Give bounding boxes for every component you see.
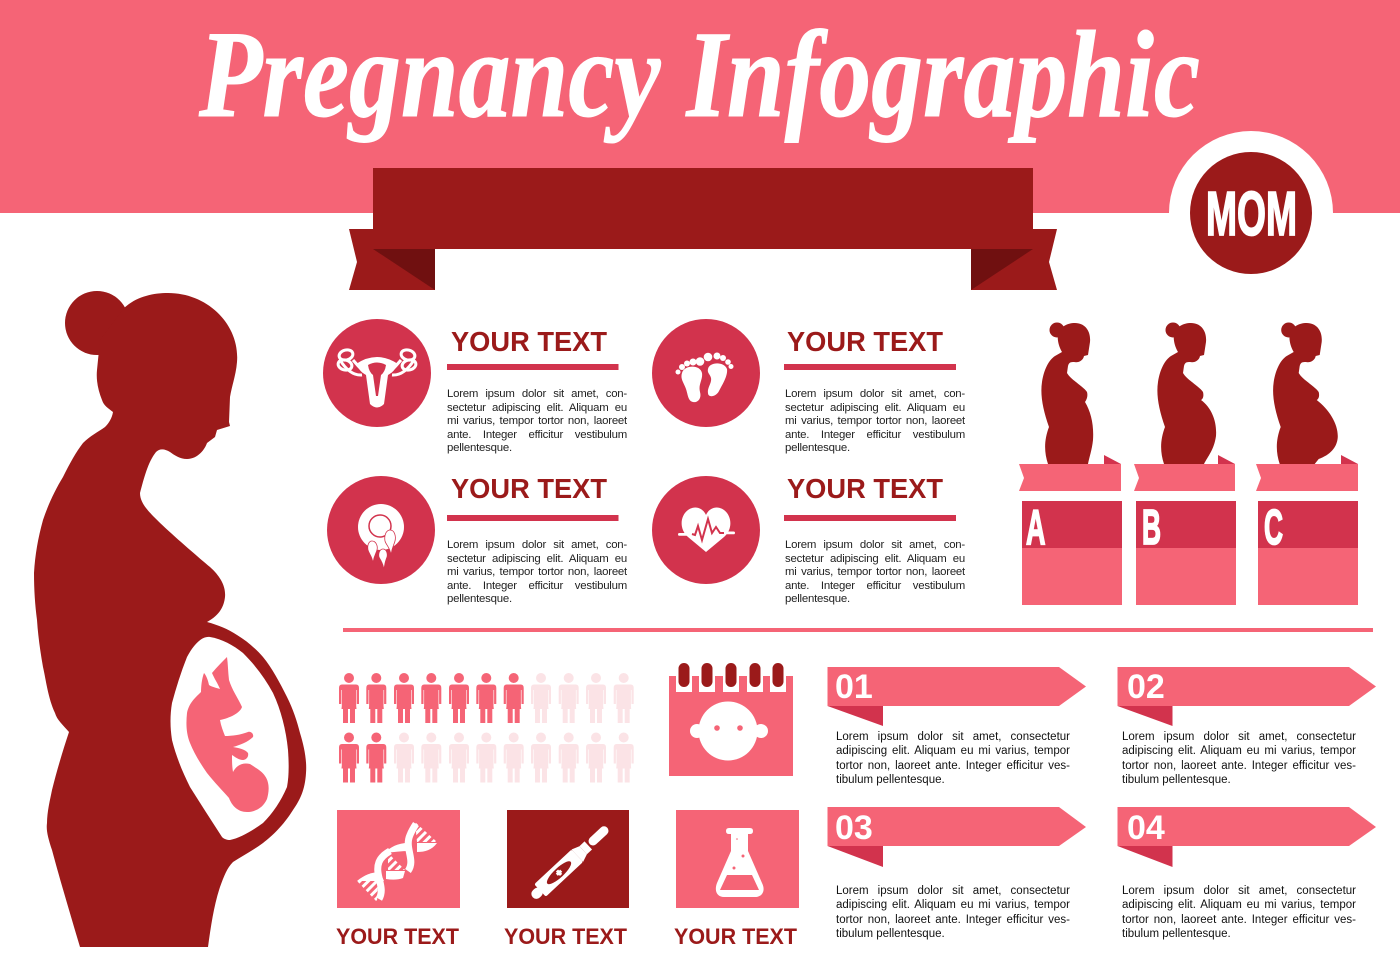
body text: sectetur adipiscing elit. Aliquam eu [447, 553, 627, 565]
body text: sectetur adipiscing elit. Aliquam eu [447, 402, 627, 414]
body text: pellentesque. [447, 442, 512, 454]
body text [447, 539, 627, 609]
body text: ante. Integer efficitur vestibulum [447, 429, 627, 441]
icon: uterus [323, 319, 431, 427]
feature: fertilisation [327, 473, 627, 609]
step 01: Lorem ipsum dolor sit amet, consectetur [836, 731, 1070, 743]
caption: DNA: YOUR TEXT [336, 924, 459, 949]
silhouette A [1041, 322, 1093, 464]
icon: DNA helix [357, 822, 437, 902]
pictogram row 2: 2 of 11 [339, 732, 634, 782]
caption: flask: YOUR TEXT [674, 924, 797, 949]
body text: pellentesque. [785, 593, 850, 605]
box B [1136, 501, 1236, 605]
step 01: adipiscing elit. Aliquam eu mi varius, tempor [836, 745, 1070, 757]
step 03: adipiscing elit. Aliquam eu mi varius, tempor [836, 899, 1070, 911]
step 01: tortor non, laoreet ante. Integer efficitur ves- [836, 760, 1070, 772]
badge: MOM: MOM [1206, 180, 1297, 249]
body text: sectetur adipiscing elit. Aliquam eu [785, 402, 965, 414]
badge: MOM [1169, 131, 1333, 295]
body text: mi varius, tempor tortor non, laoreet [447, 566, 627, 578]
box C [1258, 501, 1358, 605]
feature: heartbeat [652, 473, 965, 609]
icon: test stick [527, 822, 613, 903]
icon: heart with pulse [652, 476, 760, 584]
body text: ante. Integer efficitur vestibulum [447, 580, 627, 592]
icon: baby calendar [669, 663, 793, 776]
body text: Lorem ipsum dolor sit amet, con- [447, 539, 627, 551]
header band [0, 0, 1400, 213]
step 03: tortor non, laoreet ante. Integer efficitur ves- [836, 914, 1070, 926]
stage A [1019, 322, 1122, 605]
box C: C [1264, 501, 1283, 555]
step 03 [828, 807, 1086, 944]
tile: DNA [337, 810, 460, 908]
body text: mi varius, tempor tortor non, laoreet [785, 566, 965, 578]
feature: baby feet [652, 319, 965, 458]
step 01 [828, 667, 1086, 790]
step 04: tortor non, laoreet ante. Integer efficitur ves- [1122, 914, 1356, 926]
step 03: tibulum pellentesque. [836, 928, 945, 940]
body text: mi varius, tempor tortor non, laoreet [447, 415, 627, 427]
caption: test: YOUR TEXT [504, 924, 627, 949]
body text [447, 388, 627, 458]
body text: Lorem ipsum dolor sit amet, con- [785, 388, 965, 400]
heading: YOUR TEXT [451, 326, 607, 357]
ribbon A [1019, 455, 1121, 491]
stage B [1134, 322, 1236, 605]
step 03: 03 [835, 809, 873, 847]
fetus [186, 657, 269, 812]
ribbon banner [349, 168, 1057, 290]
tile: pregnancy test [507, 810, 629, 908]
heading: YOUR TEXT [451, 473, 607, 504]
box B: B [1142, 501, 1161, 555]
title: Pregnancy Infographic [198, 6, 1200, 143]
stage C [1256, 322, 1358, 605]
body text: Lorem ipsum dolor sit amet, con- [785, 539, 965, 551]
box A [1022, 501, 1122, 605]
body text: Lorem ipsum dolor sit amet, con- [447, 388, 627, 400]
step 02: adipiscing elit. Aliquam eu mi varius, tempor [1122, 745, 1356, 757]
step 04: tibulum pellentesque. [1122, 928, 1231, 940]
step 01: 01 [835, 668, 873, 706]
body text: ante. Integer efficitur vestibulum [785, 580, 965, 592]
tile: flask [676, 810, 799, 908]
step 02: tibulum pellentesque. [1122, 774, 1231, 786]
step 03: Lorem ipsum dolor sit amet, consectetur [836, 885, 1070, 897]
step 02 [1118, 667, 1376, 790]
body text [785, 388, 965, 458]
body text: ante. Integer efficitur vestibulum [785, 429, 965, 441]
body text [785, 539, 965, 609]
womb cavity [170, 637, 289, 840]
box A: A [1026, 501, 1046, 555]
pregnant woman silhouette [34, 291, 306, 947]
body text: pellentesque. [447, 593, 512, 605]
heading: YOUR TEXT [787, 473, 943, 504]
feature: reproductive anatomy [323, 319, 627, 458]
body text: sectetur adipiscing elit. Aliquam eu [785, 553, 965, 565]
body text: mi varius, tempor tortor non, laoreet [785, 415, 965, 427]
icon: egg and sperm [327, 476, 435, 584]
step 02: 02 [1127, 668, 1165, 706]
pictogram row 1: 7 of 11 [339, 673, 634, 723]
ribbon B [1134, 455, 1235, 491]
heading: YOUR TEXT [787, 326, 943, 357]
icon: flask [716, 828, 764, 897]
silhouette B [1157, 322, 1216, 464]
step 04: Lorem ipsum dolor sit amet, consectetur [1122, 885, 1356, 897]
step 04 [1118, 807, 1376, 944]
step 02: Lorem ipsum dolor sit amet, consectetur [1122, 731, 1356, 743]
step 04: adipiscing elit. Aliquam eu mi varius, tempor [1122, 899, 1356, 911]
step 04: 04 [1127, 809, 1165, 847]
silhouette C [1273, 322, 1338, 464]
body text: pellentesque. [785, 442, 850, 454]
icon: feet [652, 319, 760, 427]
step 02: tortor non, laoreet ante. Integer efficitur ves- [1122, 760, 1356, 772]
step 01: tibulum pellentesque. [836, 774, 945, 786]
ribbon C [1256, 455, 1358, 491]
